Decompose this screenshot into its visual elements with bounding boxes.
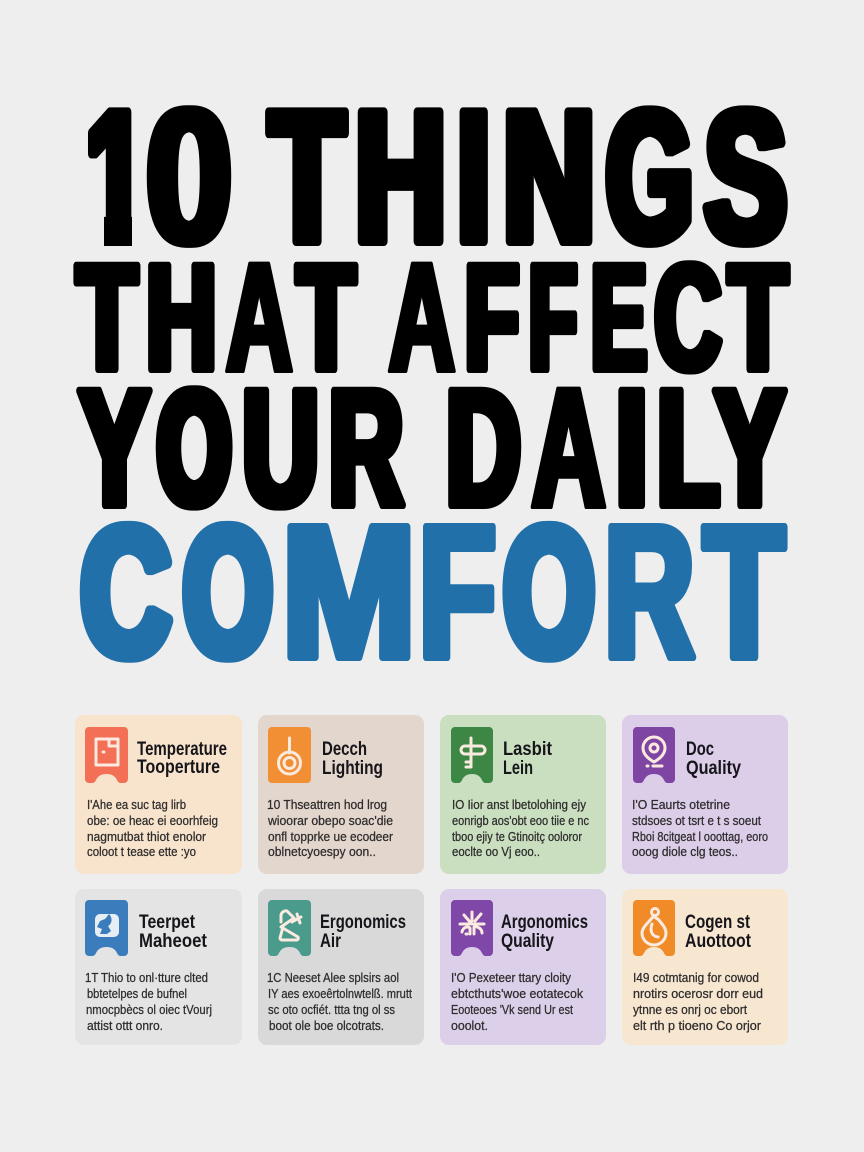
panel: card 5 (75, 889, 242, 1045)
text block: Eooteoes 'Vk send Ur est (451, 1003, 573, 1017)
heading: Teerpet (139, 912, 196, 933)
title line 2: F (465, 233, 519, 401)
title line 1: N (503, 72, 595, 281)
title line 4: C (81, 490, 170, 694)
text block: oblnetcyoespy oon.. (268, 845, 376, 859)
text block: onfl topprke ue ecodeer (268, 830, 393, 844)
text block: ytnne es onrj oc ebort (633, 1003, 747, 1017)
heading: Quality (686, 758, 741, 779)
text block: tboo ejiy te Gtinoitç ooloror (452, 830, 582, 844)
heading: Decch (322, 739, 367, 760)
title line 1: S (705, 72, 787, 281)
text block (267, 971, 412, 1033)
title line 3: A (532, 352, 605, 544)
text block: ooolot. (451, 1019, 488, 1033)
text block: nmocpbècs ol oiec tVourj (86, 1003, 212, 1017)
icon: burst (451, 900, 493, 956)
text block: 1C Neeset Alee splsirs aol (267, 971, 399, 985)
title line 2: T (297, 233, 355, 401)
heading: Cogen st (685, 912, 751, 933)
title line 2: T (77, 233, 137, 401)
title line 3: D (446, 356, 521, 541)
text block: Rboi 8citgeat l ooottag, eoro (632, 830, 768, 844)
heading: Lighting (322, 758, 383, 779)
title line 3: L (657, 356, 719, 541)
panel: card 7 (440, 889, 606, 1045)
title line 3: Y (715, 356, 785, 541)
heading (320, 912, 406, 952)
title line 1: G (606, 72, 693, 281)
title line 3: R (329, 356, 403, 541)
title line 4: O (183, 490, 272, 694)
title line 2: E (591, 233, 647, 401)
panel: card 3 (440, 715, 606, 874)
title line 2: T (729, 233, 787, 401)
text block: elt rth p tioeno Co orjor (633, 1019, 761, 1033)
icon: ergonomic figure (268, 900, 311, 956)
heading: Ergonomics (320, 912, 406, 933)
heading: Air (320, 931, 341, 952)
title line 2: A (226, 231, 292, 405)
title line 1: 1 (86, 72, 146, 281)
text block: boot ole boe olcotrats. (269, 1019, 384, 1033)
text block: IY aes exoeêrtolnwtelß. mrutt (268, 987, 412, 1001)
text block: sc oto ocfiét. ttta tng ol ss (268, 1003, 395, 1017)
title line 4: M (282, 487, 416, 698)
title line 3: U (243, 356, 319, 541)
heading: Quality (501, 931, 554, 952)
heading (503, 739, 553, 779)
title line 4: R (605, 487, 694, 698)
heading: Maheoet (139, 931, 208, 952)
title line 4: O (504, 490, 594, 694)
text block: nrotirs ocerosr dorr eud (633, 987, 763, 1001)
panel: card 4 (622, 715, 788, 874)
title line 3: O (158, 358, 230, 537)
panel: card 6 (258, 889, 424, 1045)
text block (632, 798, 768, 859)
heading: Lein (503, 758, 533, 779)
icon: plant (451, 727, 493, 783)
title line 4: F (419, 487, 496, 698)
panel: card 1 temperature (75, 715, 242, 874)
heading: Auottoot (685, 931, 752, 952)
text block: bbtetelpes de bufnel (87, 987, 187, 1001)
text block: coloot t tease ette :yo (87, 845, 196, 859)
text block: 1T Thio to onl·tture clted (85, 971, 208, 985)
heading: Doc (686, 739, 714, 760)
title line 1: 0 (146, 68, 233, 284)
text block: ooog diole clg teos.. (632, 845, 738, 859)
text block: 10 Thseattren hod lrog (267, 798, 387, 812)
text block: nagmutbat thiot enolor (87, 830, 206, 844)
panel: card 2 lighting (258, 715, 424, 874)
text block: I'O Eaurts otetrine (632, 798, 730, 812)
title line 1: H (355, 72, 446, 281)
heading: Temperature (137, 739, 227, 760)
heading: Lasbit (503, 739, 553, 760)
text block: I'Ahe ea suc tag lirb (87, 798, 186, 812)
title line 3: I (616, 356, 647, 541)
text block (452, 798, 589, 859)
icon: drop (633, 900, 675, 956)
heading (322, 739, 383, 779)
text block (87, 798, 218, 859)
text block: IO Iior anst lbetolohing ejy (452, 798, 587, 812)
title line 2: F (529, 233, 577, 401)
title line 2: A (389, 231, 455, 405)
heading: Tooperture (137, 757, 220, 778)
text block: eonrigb aos'obt eoo tiie e nc (452, 814, 589, 828)
icon: thermostat square (85, 727, 128, 783)
text block (85, 971, 212, 1033)
text block: I49 cotmtanig for cowod (633, 971, 759, 985)
text block: stdsoes ot tsrt e t s soeut (632, 814, 761, 828)
title line 1: T (270, 72, 344, 281)
heading (501, 912, 588, 952)
icon: target (633, 727, 675, 783)
heading (685, 912, 752, 952)
text block (267, 798, 393, 859)
title line 2: H (146, 233, 217, 401)
icon: light (268, 727, 311, 783)
title (70, 68, 787, 698)
text block: I'O Pexeteer ttary cloity (451, 971, 572, 985)
heading (139, 912, 208, 952)
title line 4: T (704, 487, 784, 698)
text block (451, 971, 584, 1033)
text block: obe: oe heac ei eoorhfeig (87, 814, 218, 828)
panel: card 8 (622, 889, 788, 1045)
title line 3: Y (79, 356, 149, 541)
text block (633, 971, 763, 1033)
icon: head profile (85, 900, 128, 956)
text block: eoclte oo Vj eoo.. (452, 845, 540, 859)
text block: wioorar obepo soac'die (267, 814, 393, 828)
heading (137, 739, 227, 778)
title line 2: C (655, 233, 721, 401)
title line 1: I (457, 72, 490, 281)
heading (686, 739, 741, 779)
heading: Argonomics (501, 912, 588, 933)
text block: ebtcthuts'woe eotatecok (451, 987, 584, 1001)
text block: attist ottt onro. (87, 1019, 163, 1033)
